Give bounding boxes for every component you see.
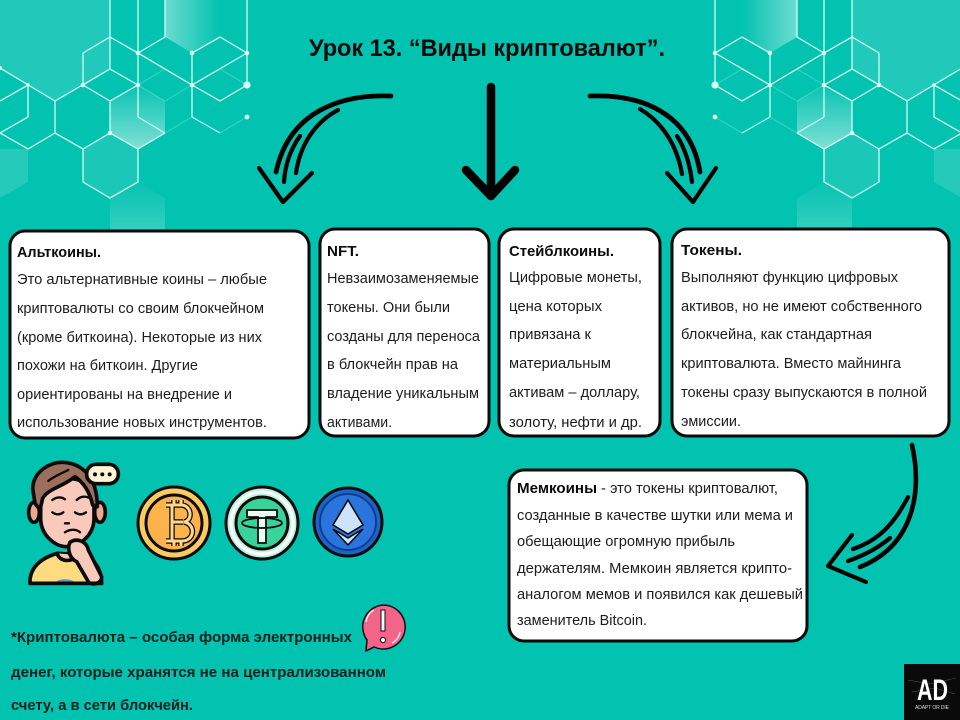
panel: tokens: криптовалюта. Вместо майнинга — [681, 355, 902, 372]
panel: NFT: NFT. — [327, 243, 359, 260]
panel: stablecoins: золоту, нефти и др. — [509, 414, 642, 431]
footnote: денег, которые хранятся не на централизованном — [11, 664, 386, 681]
panel: altcoins — [10, 231, 309, 438]
footnote: *Криптовалюта – особая форма электронных — [11, 629, 353, 646]
footnote — [11, 629, 386, 714]
panel: stablecoins: Стейблкоины. — [509, 243, 614, 260]
icon: ethereum coin — [314, 488, 382, 556]
arrow: left curved — [259, 96, 391, 202]
panel: memecoins: Мемкоины — [517, 480, 597, 497]
panel: altcoins: ориентированы на внедрение и — [17, 386, 232, 403]
panel: memecoins: заменитель Bitcoin. — [517, 612, 647, 629]
panel: NFT: владение уникальным — [327, 385, 479, 402]
panel: stablecoins: Цифровые монеты, — [509, 269, 642, 286]
logo: AD — [917, 674, 948, 707]
panel: memecoins — [509, 470, 807, 641]
panel: tokens — [672, 229, 949, 436]
panel: memecoins: аналогом мемов и появился как дешевый — [517, 586, 803, 603]
arrow: center down — [466, 87, 515, 196]
panel: altcoins: использование новых инструментов. — [17, 414, 267, 431]
panel: tokens: активов, но не имеют собственного — [681, 298, 922, 315]
panel: stablecoins: материальным — [509, 355, 611, 372]
panel: NFT: в блокчейн прав на — [327, 356, 459, 373]
panel: altcoins: Альткоины. — [17, 244, 101, 261]
panel: tokens: токены сразу выпускаются в полной — [681, 384, 927, 401]
hexagon pattern right — [711, 0, 960, 230]
panel: stablecoins: цена которых — [509, 298, 602, 315]
title: Урок 13. “Виды криптовалют”. — [309, 35, 665, 62]
icon: thinking person — [29, 462, 118, 584]
panel: memecoins: обещающие огромную прибыль — [517, 533, 735, 550]
panel: altcoins: Это альтернативные коины – любые — [17, 271, 267, 288]
icon: bitcoin coin — [138, 487, 210, 559]
panel: stablecoins: привязана к — [509, 326, 591, 343]
logo: ADAPT OR DIE — [915, 705, 950, 711]
panel: memecoins: держателям. Мемкоин является крипто- — [517, 560, 792, 577]
panel: NFT — [320, 229, 489, 436]
icon: tether coin — [226, 487, 298, 559]
panel: tokens: Выполняют функцию цифровых — [681, 269, 898, 286]
panel: memecoins: - это токены криптовалют, — [601, 480, 778, 497]
panel: tokens: Токены. — [681, 242, 742, 259]
panel: altcoins: (кроме биткоина). Некоторые из них — [17, 329, 262, 346]
panel: stablecoins — [499, 229, 660, 436]
panel: memecoins: созданные в качестве шутки или мема и — [517, 507, 793, 524]
panel: NFT: токены. Они были — [327, 299, 450, 316]
footnote: счету, а в сети блокчейн. — [11, 697, 193, 714]
logo — [904, 664, 960, 720]
panel: stablecoins: активам – доллару, — [509, 384, 640, 401]
panel: NFT: активами. — [327, 414, 392, 431]
panel: tokens: блокчейна, как стандартная — [681, 326, 872, 343]
panel: altcoins: криптовалюты со своим блокчейном — [17, 300, 264, 317]
panel: NFT: Невзаимозаменяемые — [327, 270, 479, 287]
panel: NFT: созданы для переноса — [327, 328, 481, 345]
hexagon pattern left — [0, 0, 251, 230]
icon: alert bubble — [363, 605, 405, 651]
arrow: to memecoins — [828, 445, 916, 582]
panel: tokens: эмиссии. — [681, 413, 741, 430]
arrow: right curved — [590, 96, 716, 202]
panel: altcoins: похожи на биткоин. Другие — [17, 357, 198, 374]
